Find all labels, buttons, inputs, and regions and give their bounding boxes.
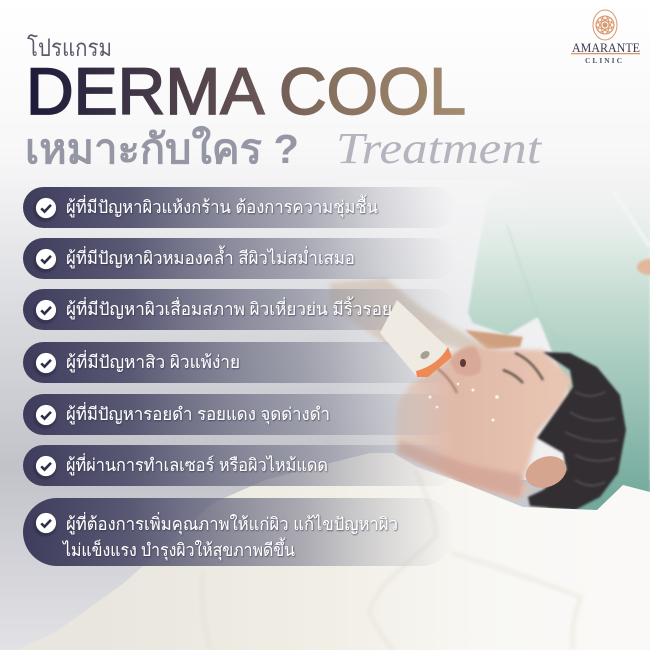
photo: practitioner scrubs [468,190,650,530]
photo: hair cap [528,352,626,510]
heading: DERMA COOL: DERMA COOL [26,54,466,128]
photo: sleeve fold [507,225,565,345]
photo: lips [437,368,457,393]
bar 3 [23,289,455,330]
bar 6 [23,445,455,486]
bar 5 [23,394,455,435]
device held to the face [380,300,452,377]
photo: neck shadow [397,440,525,498]
logo underline [571,53,640,54]
bar 1 [23,187,455,228]
bar 5: ผู้ที่มีปัญหารอยดำ รอยแดง จุดด่างดำ [66,402,330,425]
photo: nose [450,347,481,376]
logo [571,10,640,65]
photo: second hand at right edge [637,259,650,275]
photo: gloved hand [330,278,487,352]
bar 2: ผู้ที่มีปัญหาผิวหมองคล้ำ สีผิวไม่สม่ำเสมอ [66,245,355,269]
photo: practitioner arm [465,330,523,350]
photo: nostril [460,359,466,367]
device body [380,300,452,377]
logo name: AMARANTE [572,40,640,55]
bar 3: ผู้ที่มีปัญหาผิวเสื่อมสภาพ ผิวเหี่ยวย่น มีริ้วรอย [66,296,392,320]
photo: gel sparkles [428,383,499,422]
photo: hair cap ruffles [565,392,618,486]
photo: closed eye and brow [503,353,543,383]
photo: treatment scene [17,190,650,650]
bar 7: ผู้ที่ต้องการเพิ่มคุณภาพให้แก่ผิว แก้ไขปัญหาผิว [66,512,398,535]
bar 7: ไม่แข็งแรง บำรุงผิวให้สุขภาพดีขึ้น [61,537,295,561]
heading: program label: โปรแกรม [27,34,112,62]
bar 6: ผู้ที่ผ่านการทำเลเซอร์ หรือผิวไหม้แดด [66,453,328,476]
device hole [419,349,431,361]
script word: Treatment: Treatment [336,124,543,173]
photo: white towel [17,453,650,650]
photo: strap highlight [613,190,650,247]
logo mark [593,10,617,40]
device light [416,347,452,377]
bar 2 [23,238,455,279]
heading: who is it for: เหมาะกับใคร ? [25,125,299,172]
bar 4: ผู้ที่มีปัญหาสิว ผิวแพ้ง่าย [66,350,240,373]
photo: ear [521,451,571,493]
bar 1: ผู้ที่มีปัญหาผิวแห้งกร้าน ต้องการความชุ่มชื้น [66,194,378,218]
bar 7 [23,498,455,566]
photo: towel folds [202,470,581,650]
photo: face [395,345,573,500]
option bars [23,187,455,566]
bar 4 [23,342,455,383]
logo sub: CLINIC [585,56,622,65]
